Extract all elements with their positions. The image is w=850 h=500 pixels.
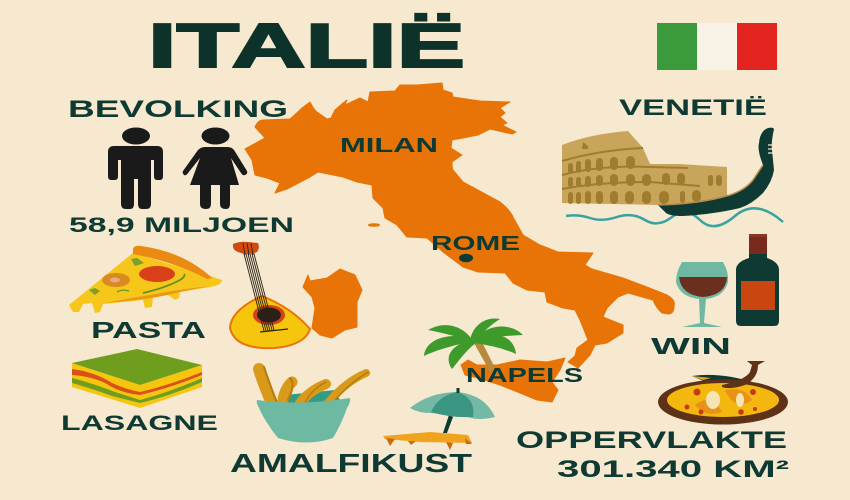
icon: lasagne [72,349,202,408]
icon: bowl of churros [257,367,368,442]
middle arch row [568,177,573,187]
icon: man [108,128,163,209]
label: Rome: ROME [431,233,520,255]
icon: beach umbrella and lounger [383,388,495,450]
island: Elba [368,224,380,226]
bottom arch row [568,192,573,204]
label: Amalfikust: AMALFIKUST [230,448,472,478]
icon: pizza slice [69,246,222,313]
title: ITALIË [148,12,465,81]
population heading: BEVOLKING [68,96,288,123]
island: Sardinia [303,269,362,338]
venice heading: VENETIË [619,95,767,120]
island: Sicily [461,358,565,402]
icon: wine bottle [736,234,779,326]
area value: 301.340 KM² [557,456,789,483]
mainland [245,83,674,368]
label: wine: WIN [651,333,731,359]
population value: 58,9 MILJOEN [69,214,294,237]
icon: water wave [566,208,783,226]
icon: wine glass [676,262,728,327]
label: Lasagne: LASAGNE [61,412,218,435]
label: Pasta: PASTA [91,317,206,343]
Rome marker [459,254,473,262]
map of Italy [245,83,674,402]
icon: woman [183,128,247,209]
icon: palm tree [424,318,523,377]
area heading: OPPERVLAKTE [516,427,787,454]
icon: gondola [658,128,774,216]
label: Milan: MILAN [340,135,438,157]
icon: paella pan [658,361,788,424]
label: Napels: NAPELS [466,365,583,387]
icon: lute [230,242,310,348]
top arch row [568,163,573,173]
icon: Italian flag [657,23,777,70]
icon: colosseum [562,131,727,205]
